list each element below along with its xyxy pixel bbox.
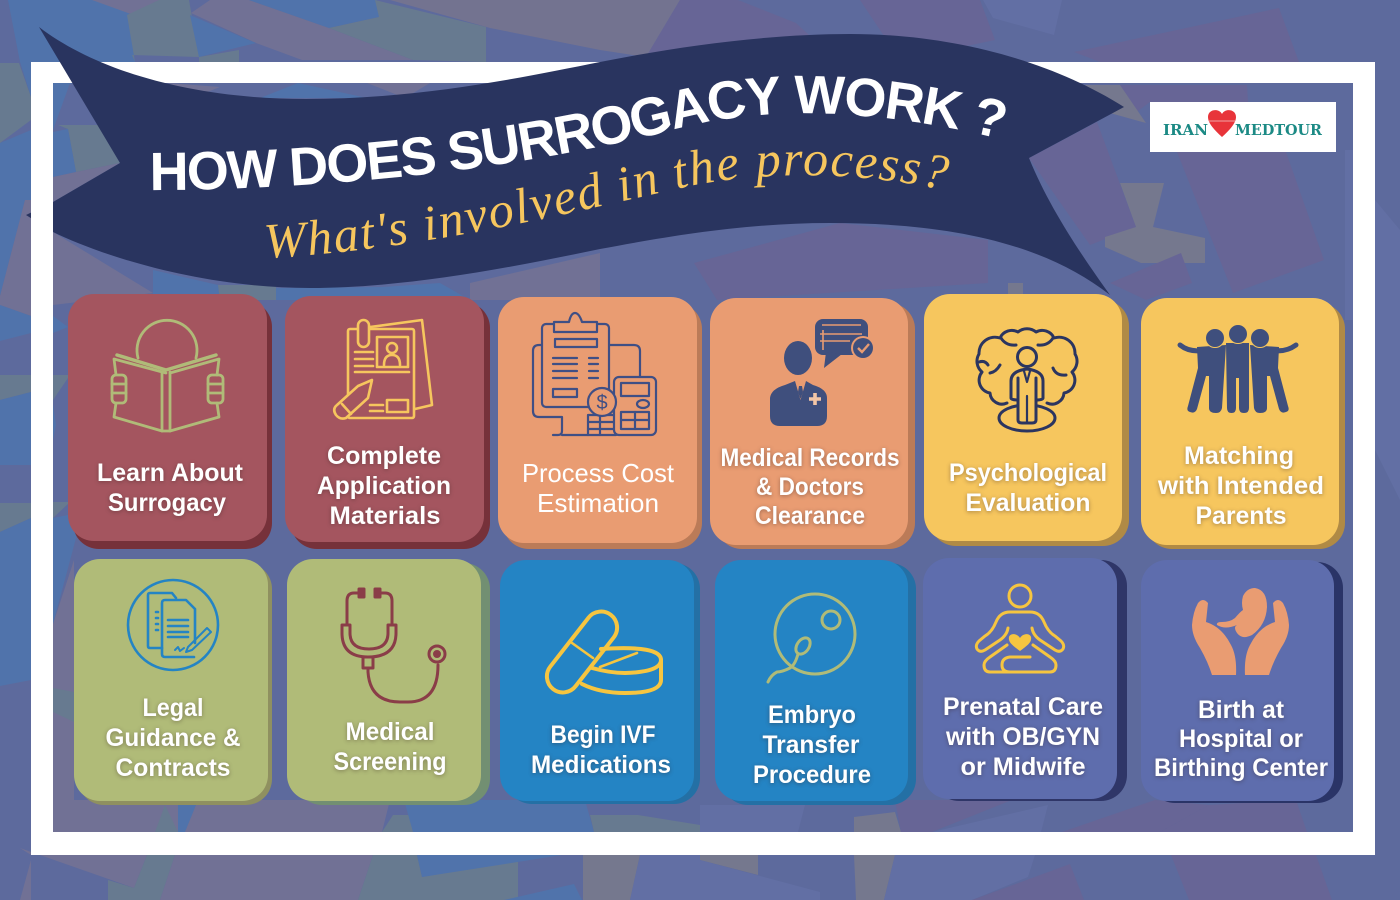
inside left xyxy=(58,125,120,172)
label xyxy=(1157,442,1324,530)
card: Medical Screening xyxy=(287,559,490,805)
label: Screening xyxy=(334,748,446,776)
card: Begin IVF Medications xyxy=(500,560,700,804)
label: Materials xyxy=(330,502,440,530)
bottom strip inside xyxy=(53,800,390,832)
label: Embryo xyxy=(768,701,856,729)
label xyxy=(753,701,871,789)
icon: clipboard, monitor and calculator xyxy=(533,313,656,435)
title: HOW DOES SURROGACY WORK ? xyxy=(153,76,1006,190)
label: Procedure xyxy=(753,761,871,789)
icon: dollar sign: $ xyxy=(596,392,608,414)
label: Contracts xyxy=(116,754,230,782)
label: Psychological xyxy=(949,459,1107,487)
label: with Intended xyxy=(1157,472,1324,500)
label: or Midwife xyxy=(960,753,1086,781)
icon: doctor with speech bubble xyxy=(770,319,875,426)
card: Psychological Evaluation xyxy=(924,294,1129,546)
label: Estimation xyxy=(537,488,659,518)
label xyxy=(531,721,671,779)
label: Transfer xyxy=(762,731,860,759)
icon: three people embracing xyxy=(1180,324,1296,413)
card: Complete Application Materials xyxy=(285,296,490,549)
subtitle: What's involved in the process? xyxy=(266,149,950,258)
icon: pills xyxy=(540,605,661,699)
bottom strip outside xyxy=(20,848,147,888)
label: Evaluation xyxy=(966,489,1090,517)
label: Birthing Center xyxy=(1154,754,1328,782)
logo: Iran Medtour xyxy=(1150,102,1336,152)
card: Medical Records & Doctors Clearance xyxy=(710,298,915,549)
icon: stethoscope xyxy=(342,589,445,702)
card: Prenatal Care with OB/GYN or Midwife xyxy=(923,558,1127,801)
logo: Iran Medtour: MEDTOUR xyxy=(1235,121,1323,139)
label: Begin IVF xyxy=(550,721,656,749)
label: Application xyxy=(317,472,451,500)
card: Matching with Intended Parents xyxy=(1141,298,1345,549)
frame segment over banner xyxy=(31,196,53,246)
label: Birth at xyxy=(1198,696,1285,724)
label: Clearance xyxy=(755,502,865,530)
label xyxy=(334,718,446,776)
icon: hands holding fetus xyxy=(1192,588,1289,675)
top right xyxy=(646,0,820,57)
label: Parents xyxy=(1196,502,1286,530)
icon: signed documents xyxy=(128,580,218,670)
card: Learn About Surrogacy xyxy=(68,294,272,549)
label: Surrogacy xyxy=(108,489,226,517)
label: & Doctors xyxy=(756,473,864,501)
label: Medical xyxy=(346,718,434,746)
icon: application form xyxy=(334,320,432,419)
icon: heart xyxy=(1009,634,1031,651)
label: Prenatal Care xyxy=(943,693,1103,721)
icon: reading book xyxy=(112,320,223,431)
label xyxy=(949,459,1107,517)
label: Process Cost xyxy=(522,458,675,488)
label xyxy=(317,442,451,530)
label xyxy=(522,458,675,518)
label: Learn About xyxy=(97,459,244,487)
label: Hospital or xyxy=(1179,725,1303,753)
logo: Iran Medtour: IRAN xyxy=(1163,121,1208,139)
label: Guidance & xyxy=(106,724,240,752)
card: Birth at Hospital or Birthing Center xyxy=(1141,560,1343,803)
icon: embryo and sperm xyxy=(768,594,855,682)
label xyxy=(97,459,244,517)
card: Embryo Transfer Procedure xyxy=(715,560,916,805)
label: Medical Records xyxy=(720,444,900,472)
label: Complete xyxy=(327,442,441,470)
label: Legal xyxy=(142,694,204,722)
icon: brain with person xyxy=(977,329,1077,431)
card: Legal Guidance & Contracts xyxy=(74,559,272,805)
banner ribbon xyxy=(26,27,1124,295)
label xyxy=(720,444,900,530)
label: with OB/GYN xyxy=(945,723,1100,751)
label: Matching xyxy=(1184,442,1294,470)
card: Process Cost Estimation xyxy=(498,297,702,549)
label: Medications xyxy=(531,751,671,779)
label xyxy=(106,694,240,782)
icon: meditating pregnant woman xyxy=(976,585,1064,672)
label xyxy=(1154,696,1328,782)
label xyxy=(943,693,1103,781)
